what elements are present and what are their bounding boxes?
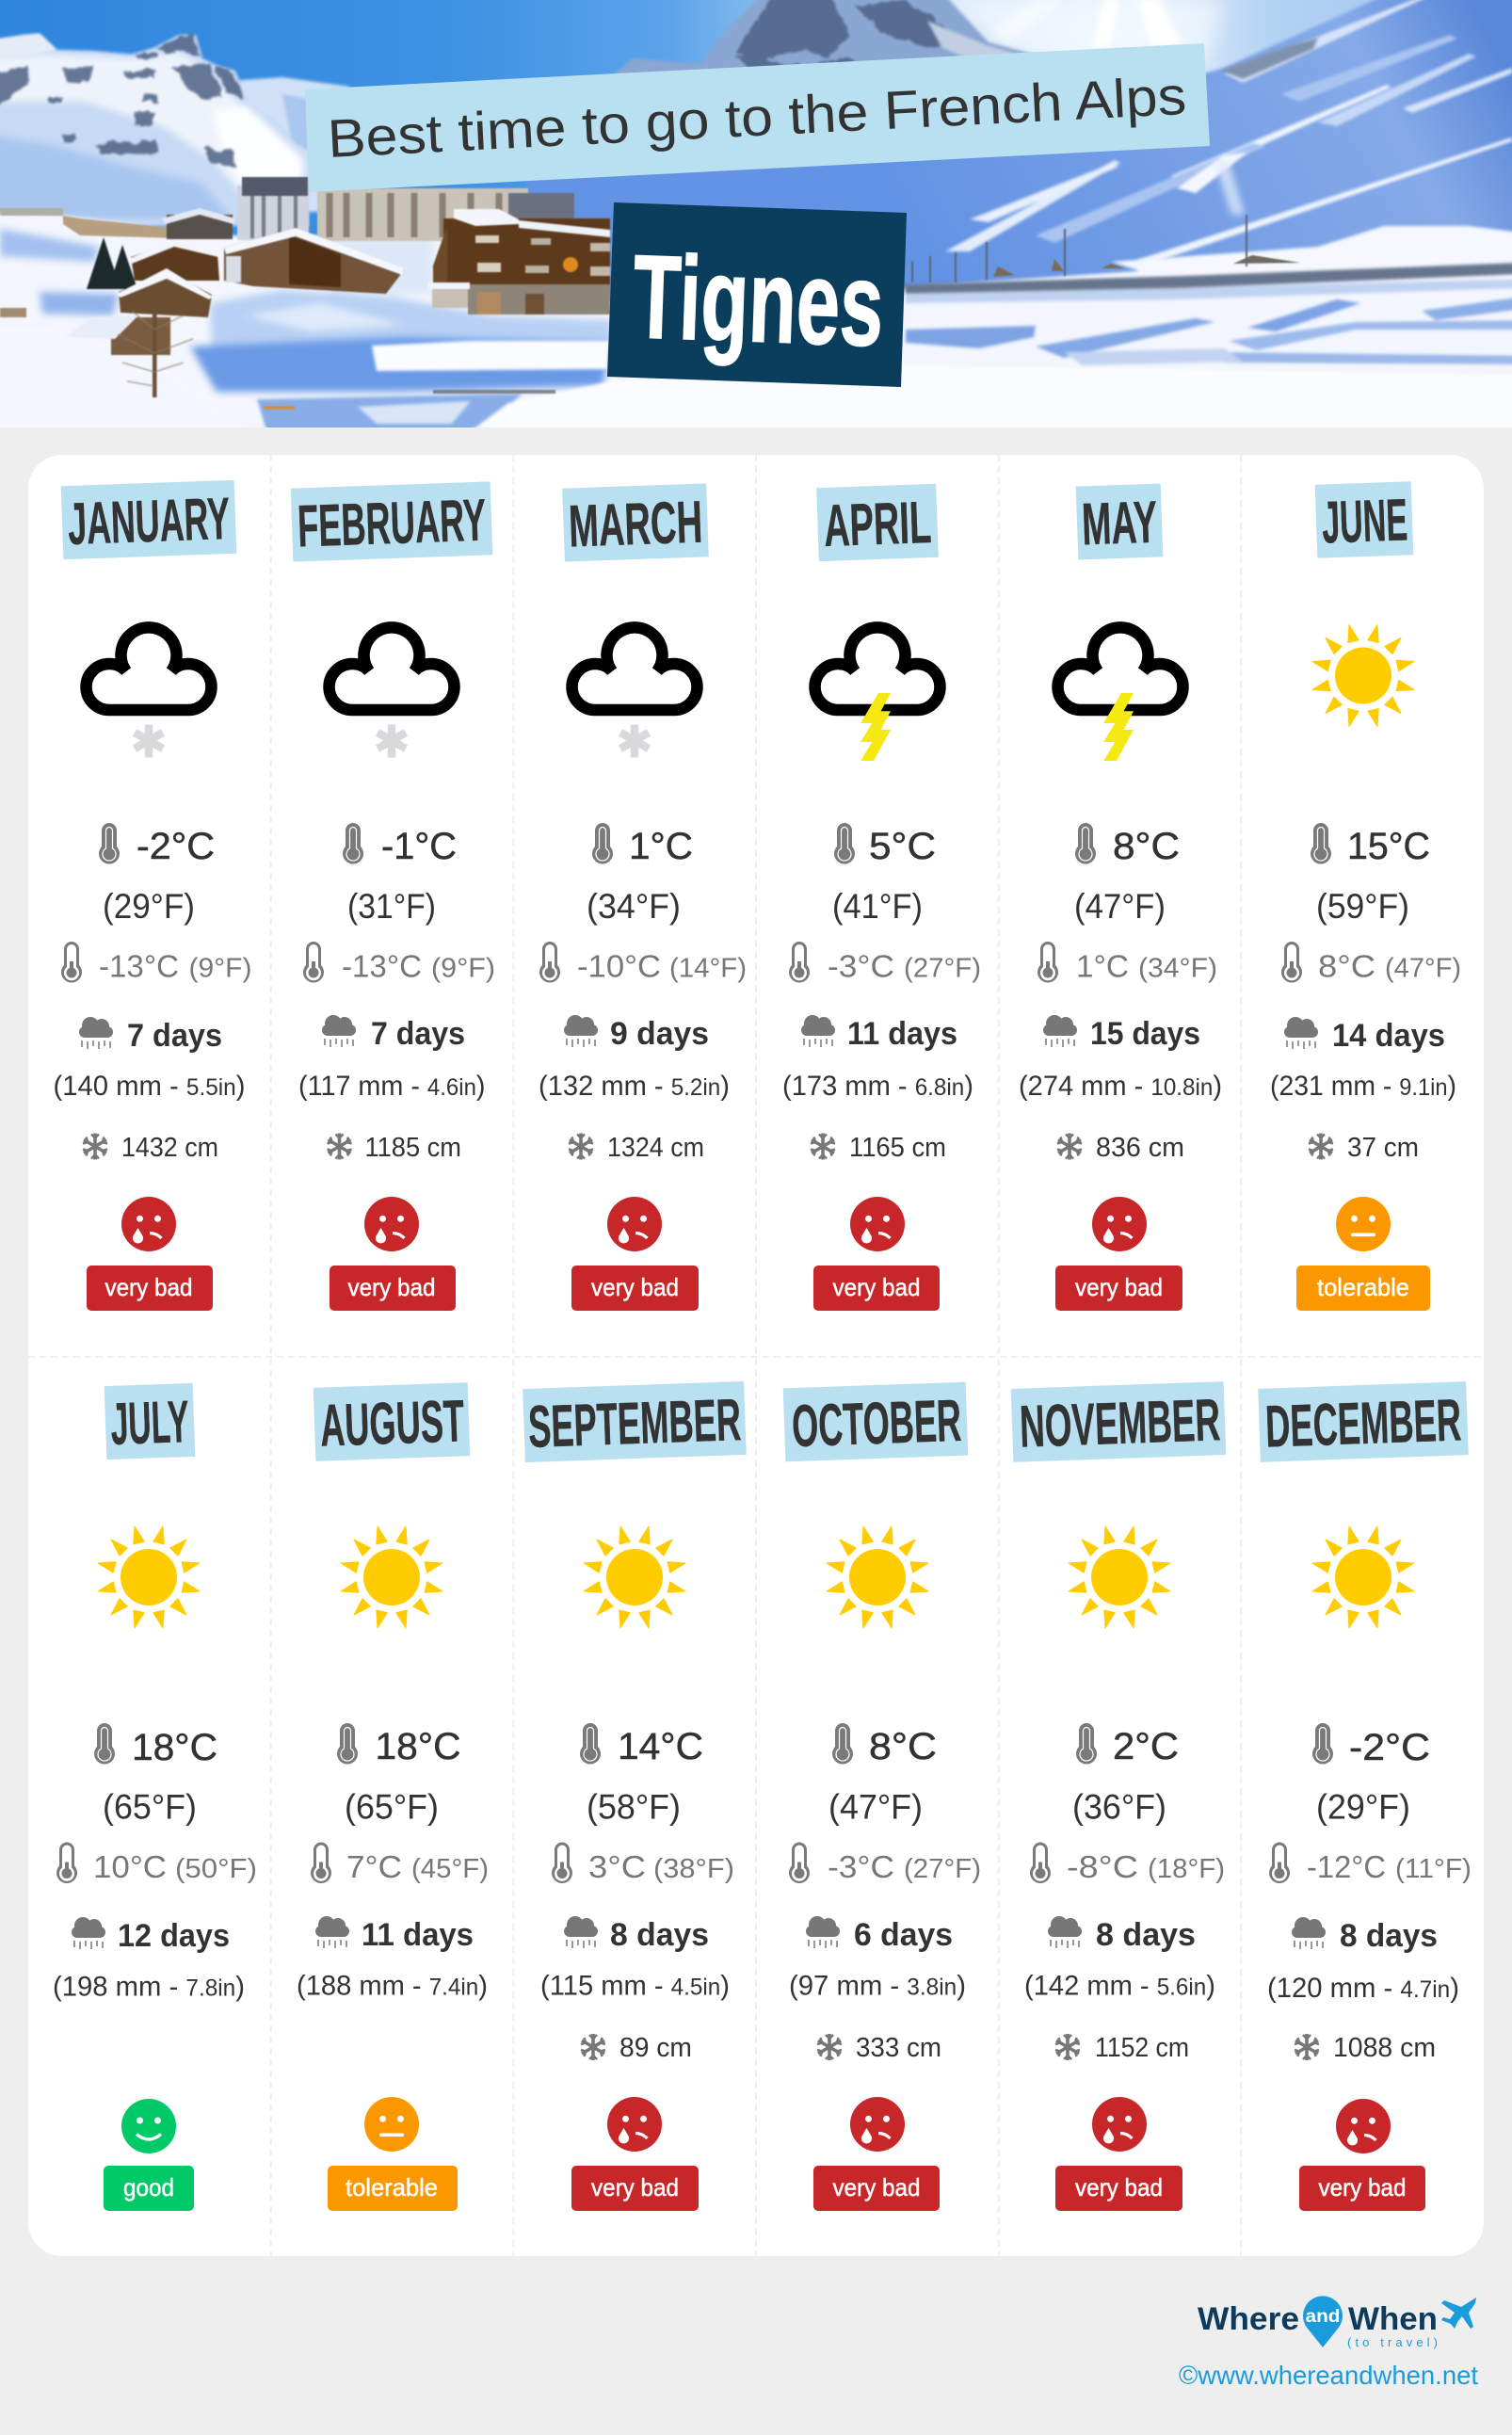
minimum temperature: 8°C — [1318, 949, 1375, 985]
month label — [562, 483, 709, 562]
month label — [1011, 1381, 1226, 1462]
month label: FEBRUARY — [297, 488, 487, 559]
rainy days: 12 days — [118, 1918, 230, 1954]
rainy days: 7 days — [127, 1018, 222, 1054]
snowfall — [811, 1133, 946, 1163]
average temperature: 2°C — [1113, 1726, 1179, 1767]
snowfall: 37 cm — [1347, 1133, 1419, 1163]
header photo: snowy alpine village — [0, 0, 1512, 452]
minimum temperature: (14°F) — [669, 953, 747, 983]
average temperature — [1311, 823, 1430, 867]
snowfall — [817, 2033, 941, 2063]
average temperature: -1°C — [381, 826, 457, 867]
icon: cloud with snow — [572, 627, 697, 757]
average temperature: 18°C — [132, 1727, 217, 1768]
rainy days — [564, 1015, 709, 1052]
panel: July — [53, 1383, 257, 2211]
rainy days: 6 days — [854, 1917, 953, 1953]
minimum temperature — [539, 942, 747, 985]
icon: sun — [584, 1526, 685, 1628]
average temperature — [1075, 823, 1180, 867]
rating: very bad — [571, 1266, 699, 1311]
icon: sun — [341, 1526, 442, 1628]
rating: tolerable — [328, 2166, 458, 2211]
icon: sun — [1312, 625, 1414, 727]
minimum temperature: (9°F) — [188, 953, 252, 983]
month label — [291, 481, 492, 562]
average temperature — [94, 1723, 217, 1768]
snowfall — [83, 1133, 218, 1163]
snowfall: 1165 cm — [849, 1133, 946, 1163]
minimum temperature: (27°F) — [904, 1854, 981, 1884]
average temperature — [592, 823, 693, 867]
minimum temperature: (18°F) — [1148, 1854, 1225, 1884]
precipitation: (274 mm - 10.8in) — [1019, 1071, 1222, 1102]
minimum temperature — [1037, 942, 1217, 985]
minimum temperature — [1281, 942, 1461, 985]
minimum temperature: -3°C — [828, 949, 894, 985]
minimum temperature: -3°C — [828, 1850, 894, 1885]
average temperature — [343, 823, 457, 867]
minimum temperature: (34°F) — [1138, 953, 1217, 983]
month label — [1076, 483, 1163, 560]
temperature fahrenheit: (65°F) — [103, 1787, 197, 1827]
rainy days: 11 days — [362, 1917, 474, 1953]
month label: JUNE — [1321, 487, 1408, 556]
forest on ridge — [1221, 38, 1318, 79]
temperature fahrenheit: (34°F) — [587, 887, 681, 926]
location tag: Tignes — [607, 202, 907, 387]
month label: MARCH — [568, 490, 703, 559]
snowfall — [328, 1133, 461, 1163]
icon: cloud with lightning — [815, 627, 940, 761]
icon: crying face — [607, 1197, 662, 1251]
temperature fahrenheit: (29°F) — [103, 887, 195, 926]
icon: airplane — [1441, 2298, 1476, 2329]
rainy days — [801, 1015, 957, 1052]
icon: crying face — [1092, 2097, 1147, 2152]
rating: very bad — [1055, 1266, 1182, 1311]
precipitation: (142 mm - 5.6in) — [1024, 1970, 1215, 2002]
average temperature — [1312, 1723, 1430, 1768]
icon: crying face — [1092, 1197, 1147, 1251]
average temperature — [834, 823, 936, 867]
minimum temperature: 3°C — [588, 1850, 646, 1885]
average temperature: 8°C — [869, 1726, 937, 1767]
minimum temperature: (38°F) — [653, 1854, 734, 1884]
rainy days — [72, 1917, 230, 1954]
icon: map pin: and — [1305, 2307, 1341, 2327]
panel: June — [1270, 481, 1461, 1311]
minimum temperature: (9°F) — [431, 953, 495, 983]
snowfall — [1057, 1133, 1184, 1163]
logo: Where and When — [1198, 2296, 1476, 2349]
icon: neutral face — [364, 2097, 419, 2152]
icon: crying face — [607, 2097, 662, 2152]
month label — [783, 1382, 968, 1461]
rating: very bad — [87, 1266, 213, 1311]
rating: very bad — [1055, 2166, 1182, 2211]
ground snow — [0, 212, 1512, 427]
minimum temperature: (50°F) — [175, 1854, 257, 1884]
logo: Where and When: When — [1348, 2301, 1438, 2337]
slope streaks — [945, 0, 1512, 263]
rating: very bad — [813, 1266, 940, 1311]
icon: cloud with snow — [330, 627, 454, 757]
rating: very bad — [1299, 2166, 1425, 2211]
rating: very bad: very bad — [1318, 2173, 1407, 2201]
precipitation: (173 mm - 6.8in) — [782, 1071, 973, 1102]
minimum temperature — [789, 1842, 981, 1885]
precipitation: (115 mm - 4.5in) — [540, 1970, 730, 2002]
minimum temperature: 10°C — [93, 1850, 167, 1885]
temperature fahrenheit: (36°F) — [1072, 1787, 1166, 1827]
rating: very bad: very bad — [1075, 2173, 1163, 2201]
month label: JANUARY — [67, 486, 231, 557]
icon: sun — [1312, 1526, 1414, 1628]
icon: cloud with lightning — [1058, 627, 1182, 761]
average temperature — [337, 1723, 461, 1767]
month label — [816, 484, 939, 561]
icon: cloud with snow — [87, 627, 211, 757]
rating: tolerable: tolerable — [1317, 1273, 1409, 1301]
rainy days — [79, 1017, 222, 1054]
minimum temperature: (47°F) — [1385, 953, 1461, 983]
panel: monthly card — [28, 455, 1484, 2256]
month label — [314, 1382, 470, 1461]
rainy days: 8 days — [1096, 1917, 1196, 1953]
temperature fahrenheit: (29°F) — [1316, 1787, 1410, 1827]
snowfall — [1309, 1133, 1419, 1163]
rating: very bad — [571, 2166, 699, 2211]
minimum temperature: (27°F) — [904, 953, 981, 983]
temperature fahrenheit: (47°F) — [828, 1787, 923, 1827]
precipitation: (188 mm - 7.4in) — [297, 1970, 488, 2002]
icon: smiling face — [121, 2099, 176, 2153]
panel: October — [783, 1382, 981, 2211]
month label: MAY — [1081, 490, 1158, 557]
precipitation: (132 mm - 5.2in) — [539, 1071, 730, 1102]
temperature fahrenheit: (58°F) — [587, 1787, 681, 1827]
minimum temperature: -13°C — [342, 949, 422, 985]
minimum temperature — [789, 942, 981, 985]
average temperature: 8°C — [1113, 826, 1180, 867]
rating: very bad — [330, 1266, 456, 1311]
panel: April — [782, 484, 981, 1311]
icon: sun — [1069, 1526, 1170, 1628]
rainy days — [1048, 1916, 1196, 1953]
icon: map pin — [1303, 2296, 1343, 2347]
icon: crying face — [1336, 2099, 1391, 2153]
minimum temperature: -8°C — [1067, 1850, 1138, 1885]
precipitation: (117 mm - 4.6in) — [298, 1071, 486, 1102]
month label: SEPTEMBER — [527, 1387, 742, 1460]
panel: November — [1011, 1381, 1226, 2211]
temperature fahrenheit: (31°F) — [347, 887, 436, 926]
temperature fahrenheit: (65°F) — [345, 1787, 439, 1827]
average temperature: 14°C — [618, 1726, 703, 1767]
title banner: Best time to go to the French Alps — [326, 66, 1187, 169]
rating: good — [104, 2166, 194, 2211]
icon: neutral face — [1336, 1197, 1391, 1251]
icon: crying face — [364, 1197, 419, 1251]
rating: very bad: very bad — [591, 1273, 679, 1301]
rainy days: 8 days — [1340, 1918, 1438, 1954]
minimum temperature: 7°C — [346, 1850, 402, 1885]
average temperature: 1°C — [629, 826, 693, 867]
minimum temperature: -10°C — [577, 949, 661, 985]
rating: very bad: very bad — [832, 1273, 921, 1301]
snowfall: 1185 cm — [365, 1133, 461, 1163]
snowfall: 89 cm — [619, 2033, 692, 2063]
icon: sun — [827, 1526, 928, 1628]
month label: JULY — [109, 1389, 190, 1458]
precipitation: (97 mm - 3.8in) — [789, 1970, 966, 2002]
temperature fahrenheit: (41°F) — [832, 887, 923, 926]
snowfall: 1152 cm — [1095, 2033, 1189, 2063]
panel: August — [297, 1382, 489, 2211]
rainy days: 7 days — [371, 1016, 465, 1052]
minimum temperature: -13°C — [99, 949, 179, 985]
minimum temperature: (45°F) — [411, 1854, 489, 1884]
rating: very bad — [813, 2166, 940, 2211]
icon: sun — [98, 1526, 200, 1628]
minimum temperature — [552, 1842, 734, 1885]
panel: February — [291, 481, 495, 1311]
snowfall — [569, 1133, 704, 1163]
month label — [105, 1383, 195, 1459]
rock outcrops — [0, 0, 965, 168]
rainy days: 14 days — [1332, 1018, 1445, 1054]
month label: OCTOBER — [791, 1388, 962, 1459]
minimum temperature: -12°C — [1307, 1850, 1386, 1885]
month label: APRIL — [823, 490, 932, 559]
rainy days — [322, 1015, 465, 1052]
precipitation: (120 mm - 4.7in) — [1267, 1973, 1459, 2004]
village buildings — [0, 177, 1300, 410]
rainy days — [806, 1916, 953, 1953]
rating: tolerable: tolerable — [346, 2173, 438, 2201]
precipitation: (231 mm - 9.1in) — [1270, 1071, 1456, 1102]
rating: very bad: very bad — [591, 2173, 679, 2201]
snowfall — [1055, 2033, 1189, 2063]
icon: crying face — [850, 1197, 905, 1251]
panel: September — [523, 1381, 747, 2211]
month label — [61, 480, 236, 559]
panel: January — [53, 480, 252, 1311]
temperature fahrenheit: (59°F) — [1316, 887, 1409, 926]
rainy days: 11 days — [847, 1016, 957, 1052]
rainy days: 15 days — [1090, 1016, 1200, 1052]
snowfall: 1324 cm — [607, 1133, 704, 1163]
precipitation: (198 mm - 7.8in) — [53, 1972, 245, 2002]
month label — [1315, 481, 1413, 558]
snowfall: 1432 cm — [121, 1133, 218, 1163]
icon: crying face — [850, 2097, 905, 2152]
logo: Where and When: Where — [1198, 2301, 1299, 2337]
average temperature — [832, 1723, 937, 1767]
average temperature: 5°C — [869, 826, 936, 867]
average temperature: 15°C — [1347, 826, 1430, 867]
title banner — [305, 43, 1210, 192]
rating: tolerable — [1296, 1266, 1430, 1311]
average temperature: 18°C — [375, 1726, 461, 1767]
rating: good: good — [123, 2173, 174, 2201]
panel: December — [1258, 1381, 1472, 2211]
rainy days — [564, 1916, 709, 1953]
snowfall: 333 cm — [856, 2033, 941, 2063]
location tag: Tignes: Tignes — [631, 230, 886, 371]
icon: crying face — [121, 1197, 176, 1251]
rating: very bad: very bad — [832, 2173, 921, 2201]
minimum temperature — [1030, 1842, 1225, 1885]
rainy days — [315, 1916, 474, 1953]
minimum temperature — [303, 942, 495, 985]
panel: March — [539, 483, 747, 1311]
month label: AUGUST — [319, 1388, 465, 1459]
snowfall: 1088 cm — [1333, 2033, 1436, 2063]
temperature fahrenheit: (47°F) — [1074, 887, 1166, 926]
snowfall: 836 cm — [1096, 1133, 1184, 1163]
sun rays — [989, 0, 1245, 215]
precipitation: (140 mm - 5.5in) — [53, 1071, 245, 1102]
minimum temperature: (11°F) — [1395, 1854, 1472, 1884]
rainy days: 9 days — [610, 1016, 709, 1052]
panel: May — [1019, 483, 1222, 1311]
average temperature: -2°C — [1349, 1727, 1430, 1768]
snowfall — [581, 2033, 692, 2063]
rainy days — [1284, 1017, 1445, 1054]
month label — [523, 1381, 747, 1462]
average temperature: -2°C — [137, 826, 215, 867]
rainy days — [1043, 1015, 1200, 1052]
rating: very bad: very bad — [348, 1273, 435, 1301]
rating: very bad: very bad — [1075, 1273, 1163, 1301]
logo: Where and When: (to travel) — [1347, 2335, 1438, 2349]
rainy days — [1292, 1917, 1438, 1954]
average temperature — [99, 823, 215, 867]
website credit: ©www.whereandwhen.net — [1179, 2361, 1478, 2390]
month label: NOVEMBER — [1019, 1387, 1221, 1460]
minimum temperature: 1°C — [1076, 949, 1129, 985]
minimum temperature — [311, 1842, 489, 1885]
rainy days: 8 days — [610, 1917, 709, 1953]
average temperature — [580, 1723, 703, 1767]
minimum temperature — [56, 1842, 257, 1885]
rating: very bad: very bad — [105, 1273, 192, 1301]
minimum temperature — [61, 942, 252, 985]
minimum temperature — [1269, 1842, 1472, 1885]
average temperature — [1076, 1723, 1179, 1767]
